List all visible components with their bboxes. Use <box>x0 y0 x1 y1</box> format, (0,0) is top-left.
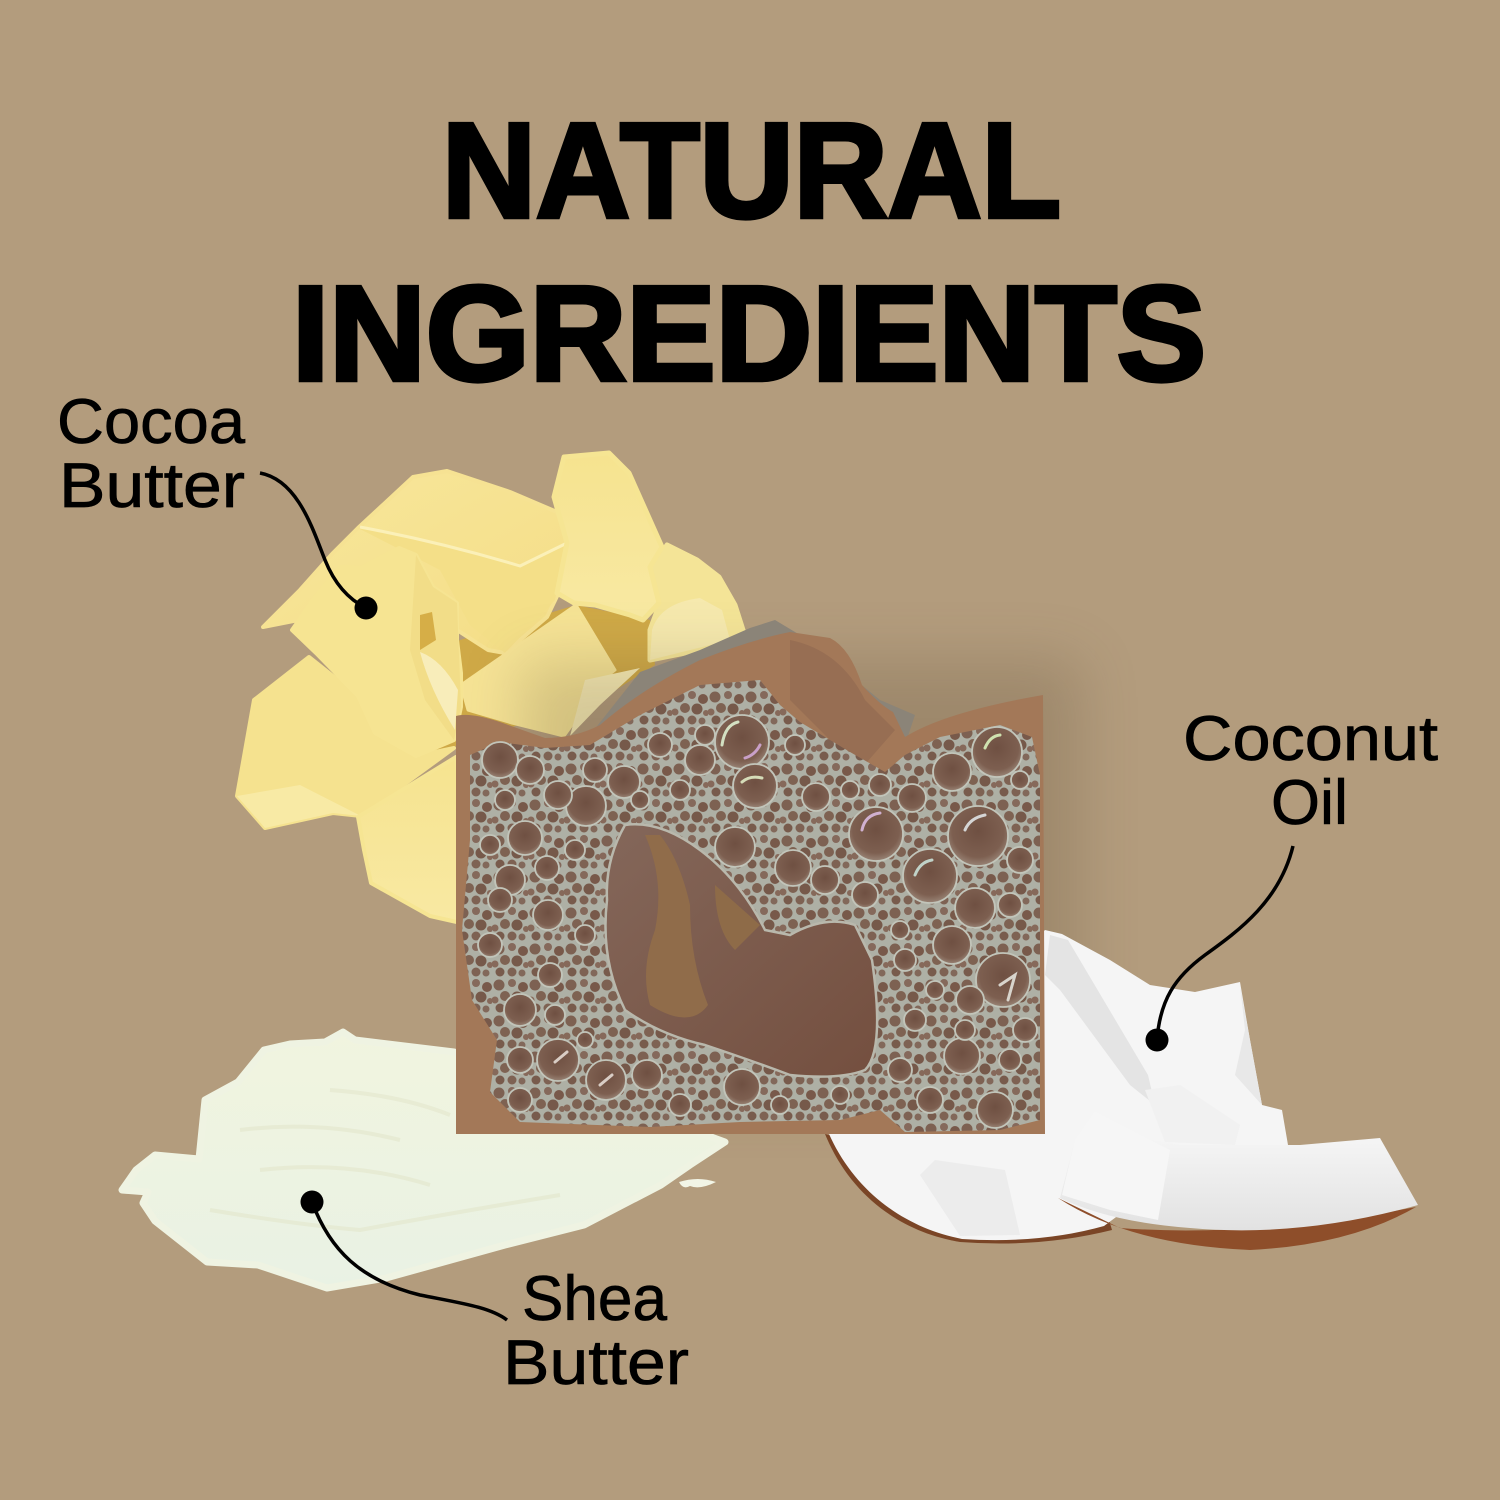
title <box>292 95 1206 409</box>
label: coconut oil <box>1183 704 1439 838</box>
coconut: shell rim <box>825 1134 1112 1244</box>
soap bubbles <box>478 715 1037 1128</box>
coconut pieces <box>825 930 1418 1250</box>
soap center pool <box>605 824 877 1077</box>
label: shea butter: Butter <box>503 1328 689 1398</box>
coconut: flesh <box>829 930 1288 1240</box>
soap bar <box>456 620 1045 1134</box>
soap shadow <box>520 660 1080 1100</box>
soap body <box>456 632 1045 1134</box>
chunk: center <box>461 605 615 736</box>
label: coconut oil: Coconut <box>1183 704 1439 774</box>
soap back ridge <box>590 620 915 745</box>
cocoa butter chunks <box>237 453 743 925</box>
leader: shea butter <box>300 1190 507 1320</box>
chunk: right <box>650 545 743 660</box>
chunk: lower left <box>237 657 454 828</box>
label: shea butter: Shea <box>522 1264 668 1334</box>
label: shea butter <box>503 1264 689 1398</box>
label: cocoa butter: Butter <box>59 451 245 521</box>
chunk: bottom <box>358 757 470 925</box>
title: INGREDIENTS <box>292 258 1206 409</box>
leader: cocoa butter <box>260 473 378 620</box>
label: coconut oil: Oil <box>1271 768 1348 838</box>
chunk: front <box>292 548 461 756</box>
leader: coconut oil <box>1146 846 1293 1052</box>
soap foam <box>462 680 1040 1132</box>
chunk: top center <box>263 471 569 653</box>
label: cocoa butter: Cocoa <box>57 387 246 457</box>
label: cocoa butter <box>57 387 246 521</box>
bubble highlights <box>555 722 1015 1085</box>
coconut: wedge <box>1058 1198 1416 1250</box>
chunk: top right <box>554 453 662 620</box>
shea butter smear <box>122 1032 725 1288</box>
title: NATURAL <box>442 95 1061 246</box>
